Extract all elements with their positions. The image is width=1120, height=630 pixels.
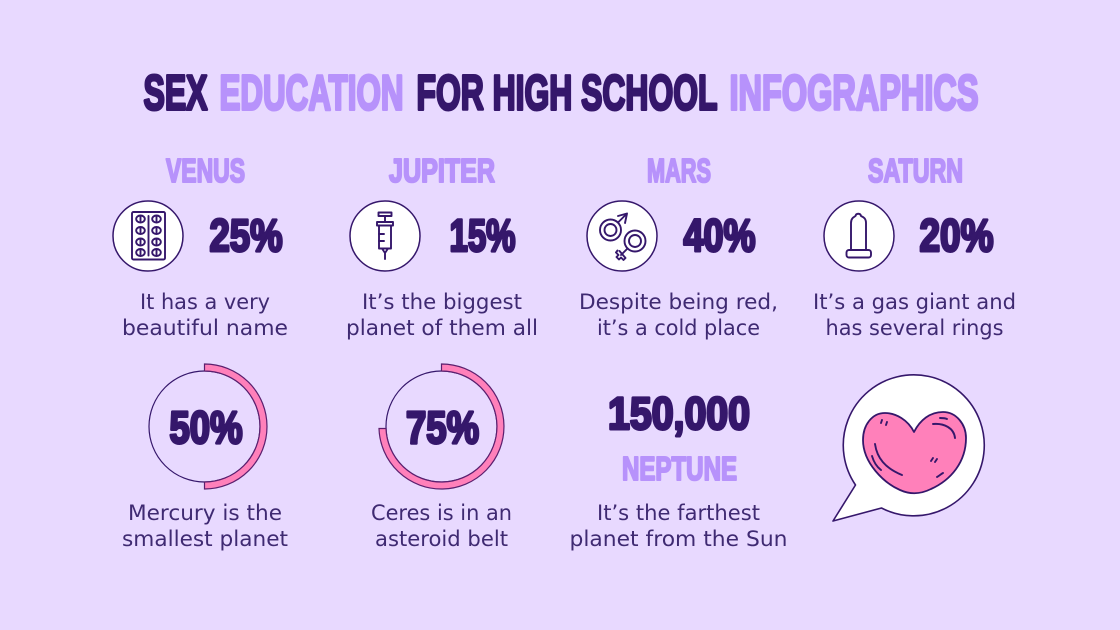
panel: Ceres (371, 364, 512, 551)
panel: Saturn (813, 152, 1016, 340)
description: Mercury: smallest planet (122, 527, 288, 551)
stat: 40%: 40% (684, 210, 756, 261)
heading: Venus: VENUS (166, 152, 245, 189)
icon: heart speech bubble (833, 375, 984, 521)
description: Neptune: It’s the farthest (597, 501, 760, 525)
heading: Jupiter: JUPITER (389, 152, 495, 189)
stat: 20%: 20% (920, 210, 994, 261)
title: SEX (144, 66, 208, 120)
panel: Jupiter (346, 152, 538, 340)
description: Neptune: planet from the Sun (570, 527, 788, 551)
panel: Neptune (570, 388, 788, 551)
stat: 15%: 15% (450, 210, 516, 261)
description: Ceres: asteroid belt (375, 527, 508, 551)
title: FOR HIGH SCHOOL (416, 66, 718, 120)
description: Saturn: It’s a gas giant and (813, 290, 1016, 314)
icon: condom (824, 201, 894, 271)
description: Mercury: Mercury is the (128, 501, 282, 525)
description: Venus: beautiful name (122, 316, 288, 340)
title (144, 66, 978, 120)
icon: syringe (350, 201, 420, 271)
heading: Saturn: SATURN (868, 152, 963, 189)
description: Mars: Despite being red, (579, 290, 778, 314)
panel: Mars (579, 152, 778, 340)
description: Mars: it’s a cold place (597, 316, 760, 340)
title: INFOGRAPHICS (730, 66, 978, 120)
heading: Neptune: NEPTUNE (622, 450, 737, 487)
stat: 75%: 75% (406, 402, 479, 453)
stat: 25%: 25% (210, 210, 282, 261)
donut chart: 50% (149, 364, 267, 489)
stat: 150,000: 150,000 (608, 388, 750, 439)
description: Jupiter: planet of them all (346, 316, 538, 340)
icon: pill blister pack (113, 201, 183, 271)
heading: Mars: MARS (647, 152, 711, 189)
panel: Venus (113, 152, 288, 340)
description: Ceres: Ceres is in an (371, 501, 512, 525)
icon: gender symbols (587, 201, 657, 271)
stat: 50%: 50% (170, 402, 242, 453)
description: Venus: It has a very (140, 290, 270, 314)
panel: Mercury (122, 364, 288, 551)
description: Saturn: has several rings (826, 316, 1004, 340)
title: EDUCATION (220, 66, 404, 120)
donut chart: 75% (379, 364, 504, 489)
description: Jupiter: It’s the biggest (362, 290, 522, 314)
